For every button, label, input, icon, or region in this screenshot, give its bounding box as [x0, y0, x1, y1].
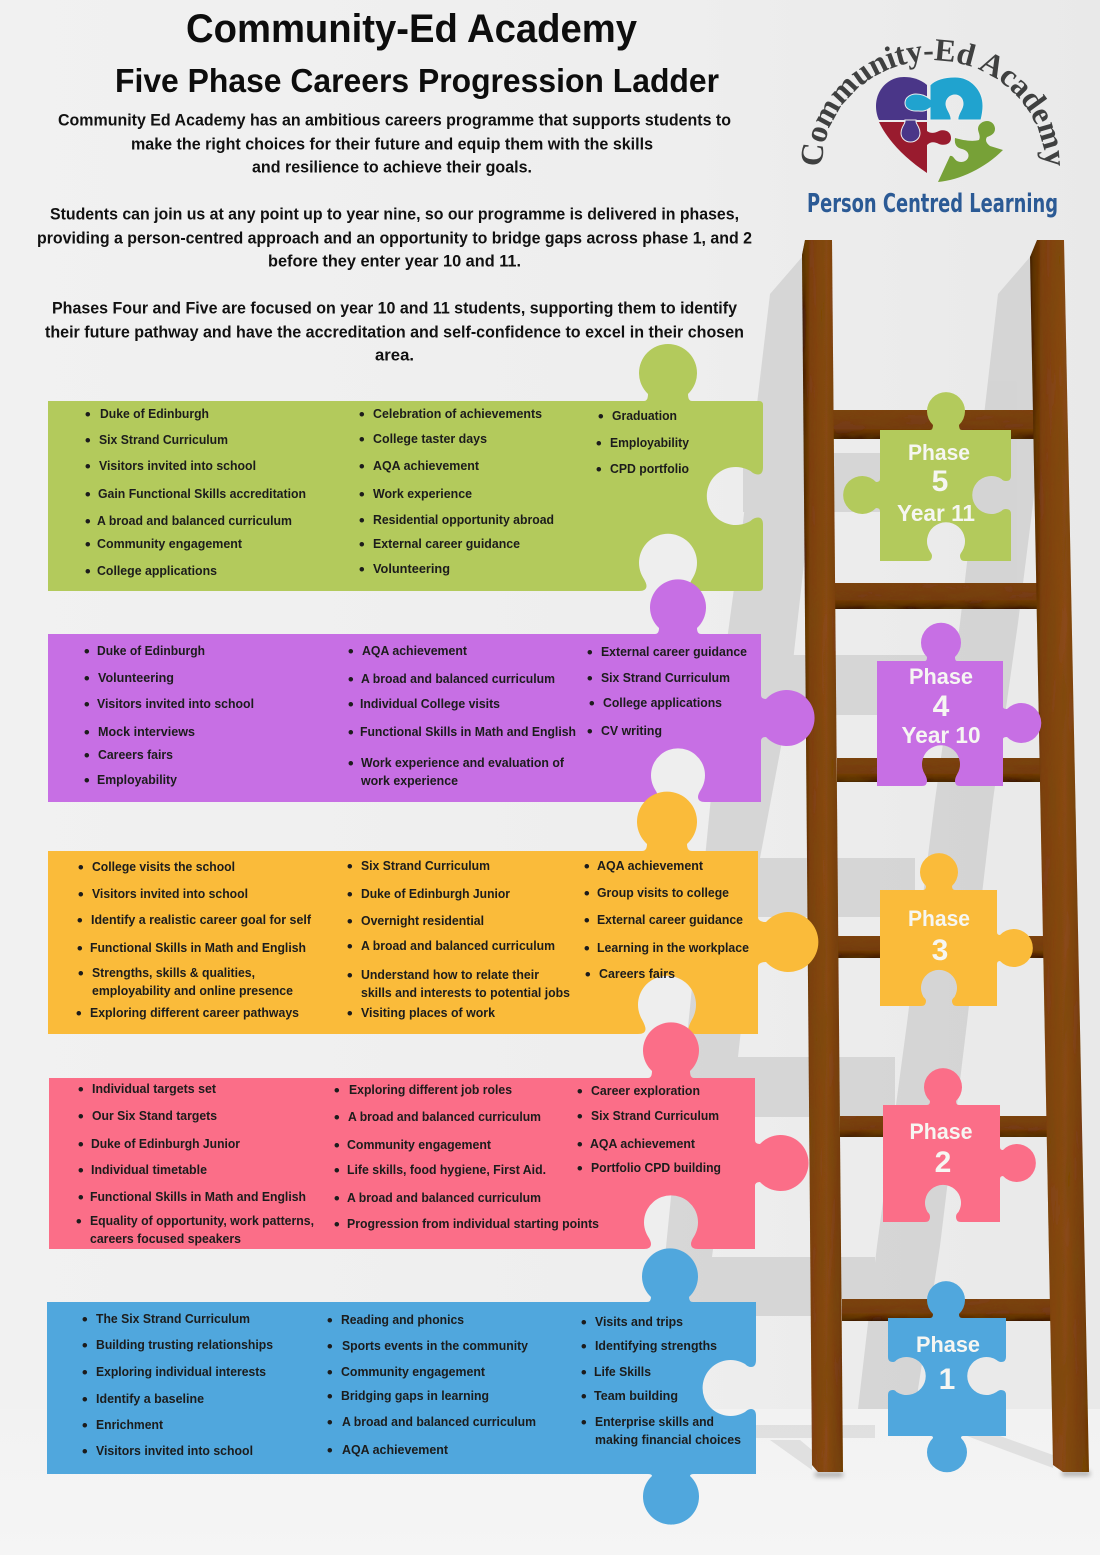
label: Phase	[916, 1332, 980, 1357]
bullets column 3: Life Skills	[594, 1364, 651, 1379]
bullets column 1: Exploring different career pathways	[90, 1005, 299, 1020]
ladder rungs	[833, 410, 1057, 1321]
bullets column 3: Career exploration	[591, 1083, 700, 1098]
bullets column 2: Understand how to relate their	[361, 967, 539, 982]
bullets column 2: A broad and balanced curriculum	[361, 671, 555, 686]
bullets column 1: •	[78, 1162, 84, 1180]
bullets column 1	[76, 859, 312, 1022]
bullets column 1: •	[78, 1136, 84, 1154]
bullets column 1: •	[82, 1444, 88, 1460]
bullets column 1: Individual timetable	[91, 1162, 207, 1177]
puzzle piece: phase 4	[877, 623, 1041, 786]
label: Phase	[908, 440, 970, 465]
bullets column 2: •	[327, 1338, 333, 1356]
bullets column 1: Building trusting relationships	[96, 1337, 273, 1352]
bullets column 3: College applications	[603, 695, 722, 710]
bullets column 1: •	[84, 748, 90, 764]
bullets column 2: Duke of Edinburgh Junior	[361, 886, 510, 901]
bullets column 3: External career guidance	[597, 912, 743, 927]
bullets column 1: College applications	[97, 563, 217, 578]
bullets column 2: •	[334, 1082, 340, 1100]
bullets column 1: Visitors invited into school	[92, 886, 248, 901]
bullets column 3: •	[587, 670, 593, 688]
bullets column 2: •	[348, 724, 354, 742]
bullets column 2: A broad and balanced curriculum	[361, 938, 555, 953]
bullets column 1: •	[85, 406, 91, 424]
label: Phase	[909, 664, 973, 689]
intro paragraphs: before they enter year 10 and 11.	[268, 252, 521, 270]
bullets column 2	[359, 406, 554, 578]
bullets column 1: Careers fairs	[98, 747, 173, 762]
bullets column 1: •	[82, 1312, 88, 1328]
bullets column 1: •	[78, 860, 84, 876]
bullets column 1	[82, 1311, 273, 1460]
ladder left rail	[802, 240, 843, 1472]
bullets column 1: Identify a realistic career goal for self	[91, 912, 312, 927]
bullets column 1: •	[84, 670, 90, 688]
bullets column 3: Identifying strengths	[595, 1338, 717, 1353]
puzzle piece: phase 3	[880, 853, 1033, 1006]
label: Phase	[908, 906, 970, 931]
bullets column 1: •	[77, 912, 83, 930]
bullets column 3: •	[577, 1108, 583, 1126]
bullets column 1: Visitors invited into school	[99, 458, 256, 473]
panel: phase 4 activities	[48, 579, 815, 802]
bullets column 2: •	[359, 562, 365, 578]
bullets column 2: •	[327, 1388, 333, 1406]
bullets column 1: Employability	[97, 772, 178, 787]
bullets column 2: AQA achievement	[342, 1442, 449, 1457]
bullets column 1: Gain Functional Skills accreditation	[98, 486, 306, 501]
bullets column 2: Community engagement	[341, 1364, 486, 1379]
intro paragraphs: area.	[375, 346, 414, 364]
bullets column 1: Functional Skills in Math and English	[90, 940, 306, 955]
ladder shadow on wall	[640, 257, 1090, 1477]
bullets column 1: College visits the school	[92, 859, 235, 874]
puzzle piece: phase 1	[888, 1281, 1006, 1472]
bullets column 2: •	[347, 886, 353, 904]
bullets column 2: Bridging gaps in learning	[341, 1388, 489, 1403]
bullets column 1: Our Six Stand targets	[92, 1108, 217, 1123]
bullets column 3: •	[584, 940, 590, 958]
bullets column 2: •	[334, 1216, 340, 1234]
bullets column 1: •	[76, 1214, 82, 1230]
bullets column 3: CV writing	[601, 723, 662, 738]
bullets column 2: Life skills, food hygiene, First Aid.	[347, 1162, 546, 1177]
title	[115, 7, 719, 99]
bullets column 1: •	[85, 486, 91, 504]
panel: phase 3 activities	[48, 792, 818, 1034]
bullets column 1: Visitors invited into school	[96, 1443, 253, 1458]
bullets column 1: Enrichment	[96, 1417, 164, 1432]
bullets column 2: Overnight residential	[361, 913, 484, 928]
bullets column 3	[596, 408, 690, 478]
label	[916, 1332, 980, 1396]
bullets column 2: •	[359, 406, 365, 424]
bullets column 2: Work experience and evaluation of	[361, 755, 565, 770]
bullets column 3: •	[596, 462, 602, 478]
bullets column 3: AQA achievement	[590, 1136, 696, 1151]
bullets column 3: Enterprise skills and	[595, 1414, 714, 1429]
label	[908, 906, 970, 967]
puzzle piece: phase 5	[843, 392, 1011, 561]
bullets column 3: Portfolio CPD building	[591, 1160, 721, 1175]
bullets column 1: •	[85, 458, 91, 476]
bullets column 2: •	[347, 1006, 353, 1022]
intro paragraphs: providing a person-centred approach and an opportunity to bridge gaps across phase 1, and 2	[37, 230, 752, 248]
bullets column 1: •	[84, 644, 90, 660]
bullets column 3: •	[587, 644, 593, 662]
logo arc text	[822, 61, 1045, 167]
bullets column 2: •	[348, 756, 354, 772]
bullets column 2: •	[348, 644, 354, 660]
label	[902, 664, 980, 748]
bullets column 3: Six Strand Curriculum	[601, 670, 730, 685]
bullets column 3: •	[577, 1160, 583, 1178]
ladder right rail	[1030, 240, 1089, 1472]
bullets column 1: •	[82, 1392, 88, 1408]
bullets column 3: •	[581, 1314, 587, 1332]
logo: Community-Ed Academy	[802, 39, 1060, 166]
bullets column 2	[327, 1312, 536, 1460]
bullets column 1: Visitors invited into school	[97, 696, 254, 711]
bullets column 2: •	[327, 1312, 333, 1330]
bullets column 1: •	[78, 1190, 84, 1206]
bullets column 2: •	[359, 536, 365, 554]
label: Year 11	[897, 500, 975, 526]
bullets column 1: •	[85, 564, 91, 580]
label	[910, 1119, 972, 1179]
bullets column 2: College taster days	[373, 431, 487, 446]
bullets column 3: •	[577, 1136, 583, 1154]
bullets column 1: •	[78, 886, 84, 904]
bullets column 1: Six Strand Curriculum	[99, 432, 228, 447]
bullets column 2: A broad and balanced curriculum	[342, 1414, 536, 1429]
bullets column 2: •	[347, 968, 353, 984]
bullets column 2: •	[348, 672, 354, 688]
bullets column 2: Celebration of achievements	[373, 406, 542, 421]
bullets column 1	[76, 1081, 314, 1246]
bullets column 3: •	[581, 1364, 587, 1382]
bullets column 3: Six Strand Curriculum	[591, 1108, 719, 1123]
bullets column 2: •	[334, 1162, 340, 1180]
bullets column 3: Visits and trips	[595, 1314, 683, 1329]
bullets column 3: External career guidance	[601, 644, 747, 659]
bullets column 1: •	[82, 1338, 88, 1354]
bullets column 2: AQA achievement	[373, 458, 480, 473]
subtitle: Five Phase Careers Progression Ladder	[115, 62, 719, 99]
bullets column 1: Functional Skills in Math and English	[90, 1189, 306, 1204]
bullets column 1: Duke of Edinburgh	[100, 406, 209, 421]
bullets column 1: •	[76, 1006, 82, 1022]
bullets column 2: •	[347, 938, 353, 956]
bullets column 2: A broad and balanced curriculum	[347, 1190, 541, 1205]
bullets column 2: AQA achievement	[362, 643, 468, 658]
bullets column 1: Individual targets set	[92, 1081, 217, 1096]
bullets column 1: •	[85, 536, 91, 554]
bullets column 1: Duke of Edinburgh Junior	[91, 1136, 240, 1151]
bullets column 2: Exploring different job roles	[349, 1082, 512, 1097]
label: 5	[932, 465, 948, 498]
bullets column 1: Identify a baseline	[96, 1391, 204, 1406]
bullets column 2: Residential opportunity abroad	[373, 512, 554, 527]
bullets column 2: External career guidance	[373, 536, 520, 551]
panel: phase 2 activities	[49, 1022, 809, 1249]
bullets column 2: •	[359, 486, 365, 504]
bullets column 3: Employability	[610, 435, 690, 450]
bullets column 2: •	[327, 1414, 333, 1432]
ladder	[802, 240, 1089, 1472]
bullets column 1: •	[84, 772, 90, 790]
bullets column 1: Community engagement	[97, 536, 243, 551]
bullets column 3: Team building	[594, 1388, 678, 1403]
bullets column 1: •	[78, 1082, 84, 1098]
bullets column 2: Functional Skills in Math and English	[360, 724, 576, 739]
label: 1	[939, 1363, 955, 1396]
panel: phase 5 activities	[48, 344, 763, 591]
intro paragraphs: Students can join us at any point up to year nine, so our programme is delivered in phases,	[50, 206, 739, 224]
bullets column 3: •	[587, 724, 593, 740]
bullets column 2: •	[334, 1138, 340, 1154]
bullets column 2: •	[347, 914, 353, 930]
bullets column 1	[85, 406, 306, 580]
panel: phase 1 activities	[47, 1248, 756, 1525]
intro paragraphs: make the right choices for their future and equip them with the skills	[131, 136, 653, 154]
bullets column 3: •	[598, 408, 604, 426]
logo heart puzzle	[876, 77, 1003, 182]
bullets column 2: •	[327, 1442, 333, 1460]
bullets column 2: •	[359, 432, 365, 448]
bullets column 2: •	[334, 1110, 340, 1126]
bullets column 3: Careers fairs	[599, 966, 675, 981]
bullets column 1: Equality of opportunity, work patterns,	[90, 1213, 314, 1228]
logo	[802, 39, 1060, 219]
bullets column 2: Volunteering	[373, 561, 450, 576]
bullets column 3: •	[584, 912, 590, 930]
bullets column 1: •	[85, 432, 91, 450]
bullets column 2: •	[359, 458, 365, 476]
intro paragraphs: Phases Four and Five are focused on year 10 and 11 students, supporting them to identify	[52, 300, 738, 318]
bullets column 1: •	[82, 1364, 88, 1382]
bullets column 1: •	[77, 940, 83, 958]
bullets column 3	[587, 644, 747, 740]
bullets column 1: A broad and balanced curriculum	[97, 513, 292, 528]
bullets column 3: •	[577, 1084, 583, 1100]
bullets column 2: Sports events in the community	[342, 1338, 529, 1353]
bullets column 1: The Six Strand Curriculum	[96, 1311, 250, 1326]
bullets column 3: Learning in the workplace	[597, 940, 749, 955]
bullets column 1: careers focused speakers	[90, 1231, 241, 1246]
bullets column 2: Reading and phonics	[341, 1312, 464, 1327]
bullets column 1: •	[85, 514, 91, 530]
bullets column 2	[348, 643, 576, 788]
intro paragraphs: Community Ed Academy has an ambitious careers programme that supports students to	[58, 112, 731, 130]
bullets column 3	[577, 1083, 721, 1178]
bullets column 2: Visiting places of work	[361, 1005, 496, 1020]
bullets column 3: •	[581, 1338, 587, 1356]
bullets column 3: AQA achievement	[597, 858, 704, 873]
bullets column 1: Volunteering	[98, 670, 174, 685]
bullets column 1: •	[78, 966, 84, 982]
bullets column 1: •	[78, 1108, 84, 1126]
bullets column 2: •	[334, 1190, 340, 1208]
label: 2	[935, 1146, 951, 1179]
bullets column 2: Six Strand Curriculum	[361, 858, 490, 873]
bullets column 3: •	[581, 1388, 587, 1406]
bullets column 3	[584, 858, 749, 984]
label: Phase	[910, 1119, 972, 1144]
bullets column 2: •	[347, 858, 353, 876]
bullets column 1: Strengths, skills & qualities,	[92, 965, 255, 980]
label: 4	[933, 690, 950, 723]
bullets column 1: •	[84, 696, 90, 714]
bullets column 3: •	[596, 436, 602, 452]
bullets column 2: A broad and balanced curriculum	[348, 1109, 541, 1124]
bullets column 2	[347, 858, 570, 1022]
puzzle piece: phase 2	[883, 1068, 1036, 1222]
bullets column 2: Community engagement	[347, 1137, 492, 1152]
bullets column 2: Progression from individual starting points	[347, 1216, 599, 1231]
bullets column 1: Exploring individual interests	[96, 1364, 266, 1379]
bullets column 3: •	[584, 858, 590, 876]
bullets column 2: •	[359, 512, 365, 530]
bullets column 3	[581, 1314, 741, 1447]
intro paragraphs: their future pathway and have the accreditation and self-confidence to excel in their chosen	[45, 324, 744, 342]
bullets column 1: employability and online presence	[92, 983, 293, 998]
bullets column 1: Duke of Edinburgh	[97, 643, 205, 658]
bullets column 2: Individual College visits	[360, 696, 500, 711]
label: Year 10	[902, 722, 980, 748]
bullets column 3: CPD portfolio	[610, 461, 689, 476]
bullets column 2: work experience	[360, 773, 458, 788]
bullets column 3: •	[581, 1414, 587, 1432]
bullets column 1: •	[82, 1418, 88, 1434]
bullets column 2: skills and interests to potential jobs	[361, 985, 570, 1000]
bullets column 1: •	[84, 724, 90, 742]
title: Community-Ed Academy	[186, 7, 638, 51]
label: 3	[932, 934, 948, 967]
bullets column 2	[334, 1082, 599, 1234]
intro paragraphs	[37, 112, 752, 364]
bullets column 3: •	[589, 696, 595, 712]
bullets column 1: Mock interviews	[98, 724, 195, 739]
bullets column 1	[84, 643, 254, 790]
bullets column 2: •	[327, 1364, 333, 1382]
intro paragraphs: and resilience to achieve their goals.	[252, 158, 532, 176]
bullets column 3: Group visits to college	[597, 885, 729, 900]
label	[897, 440, 975, 526]
bullets column 3: Graduation	[612, 408, 677, 423]
bullets column 3: •	[585, 966, 591, 984]
bullets column 3: making financial choices	[595, 1432, 741, 1447]
bullets column 3: •	[584, 886, 590, 902]
bullets column 2: Work experience	[373, 486, 472, 501]
bullets column 2: •	[348, 696, 354, 714]
